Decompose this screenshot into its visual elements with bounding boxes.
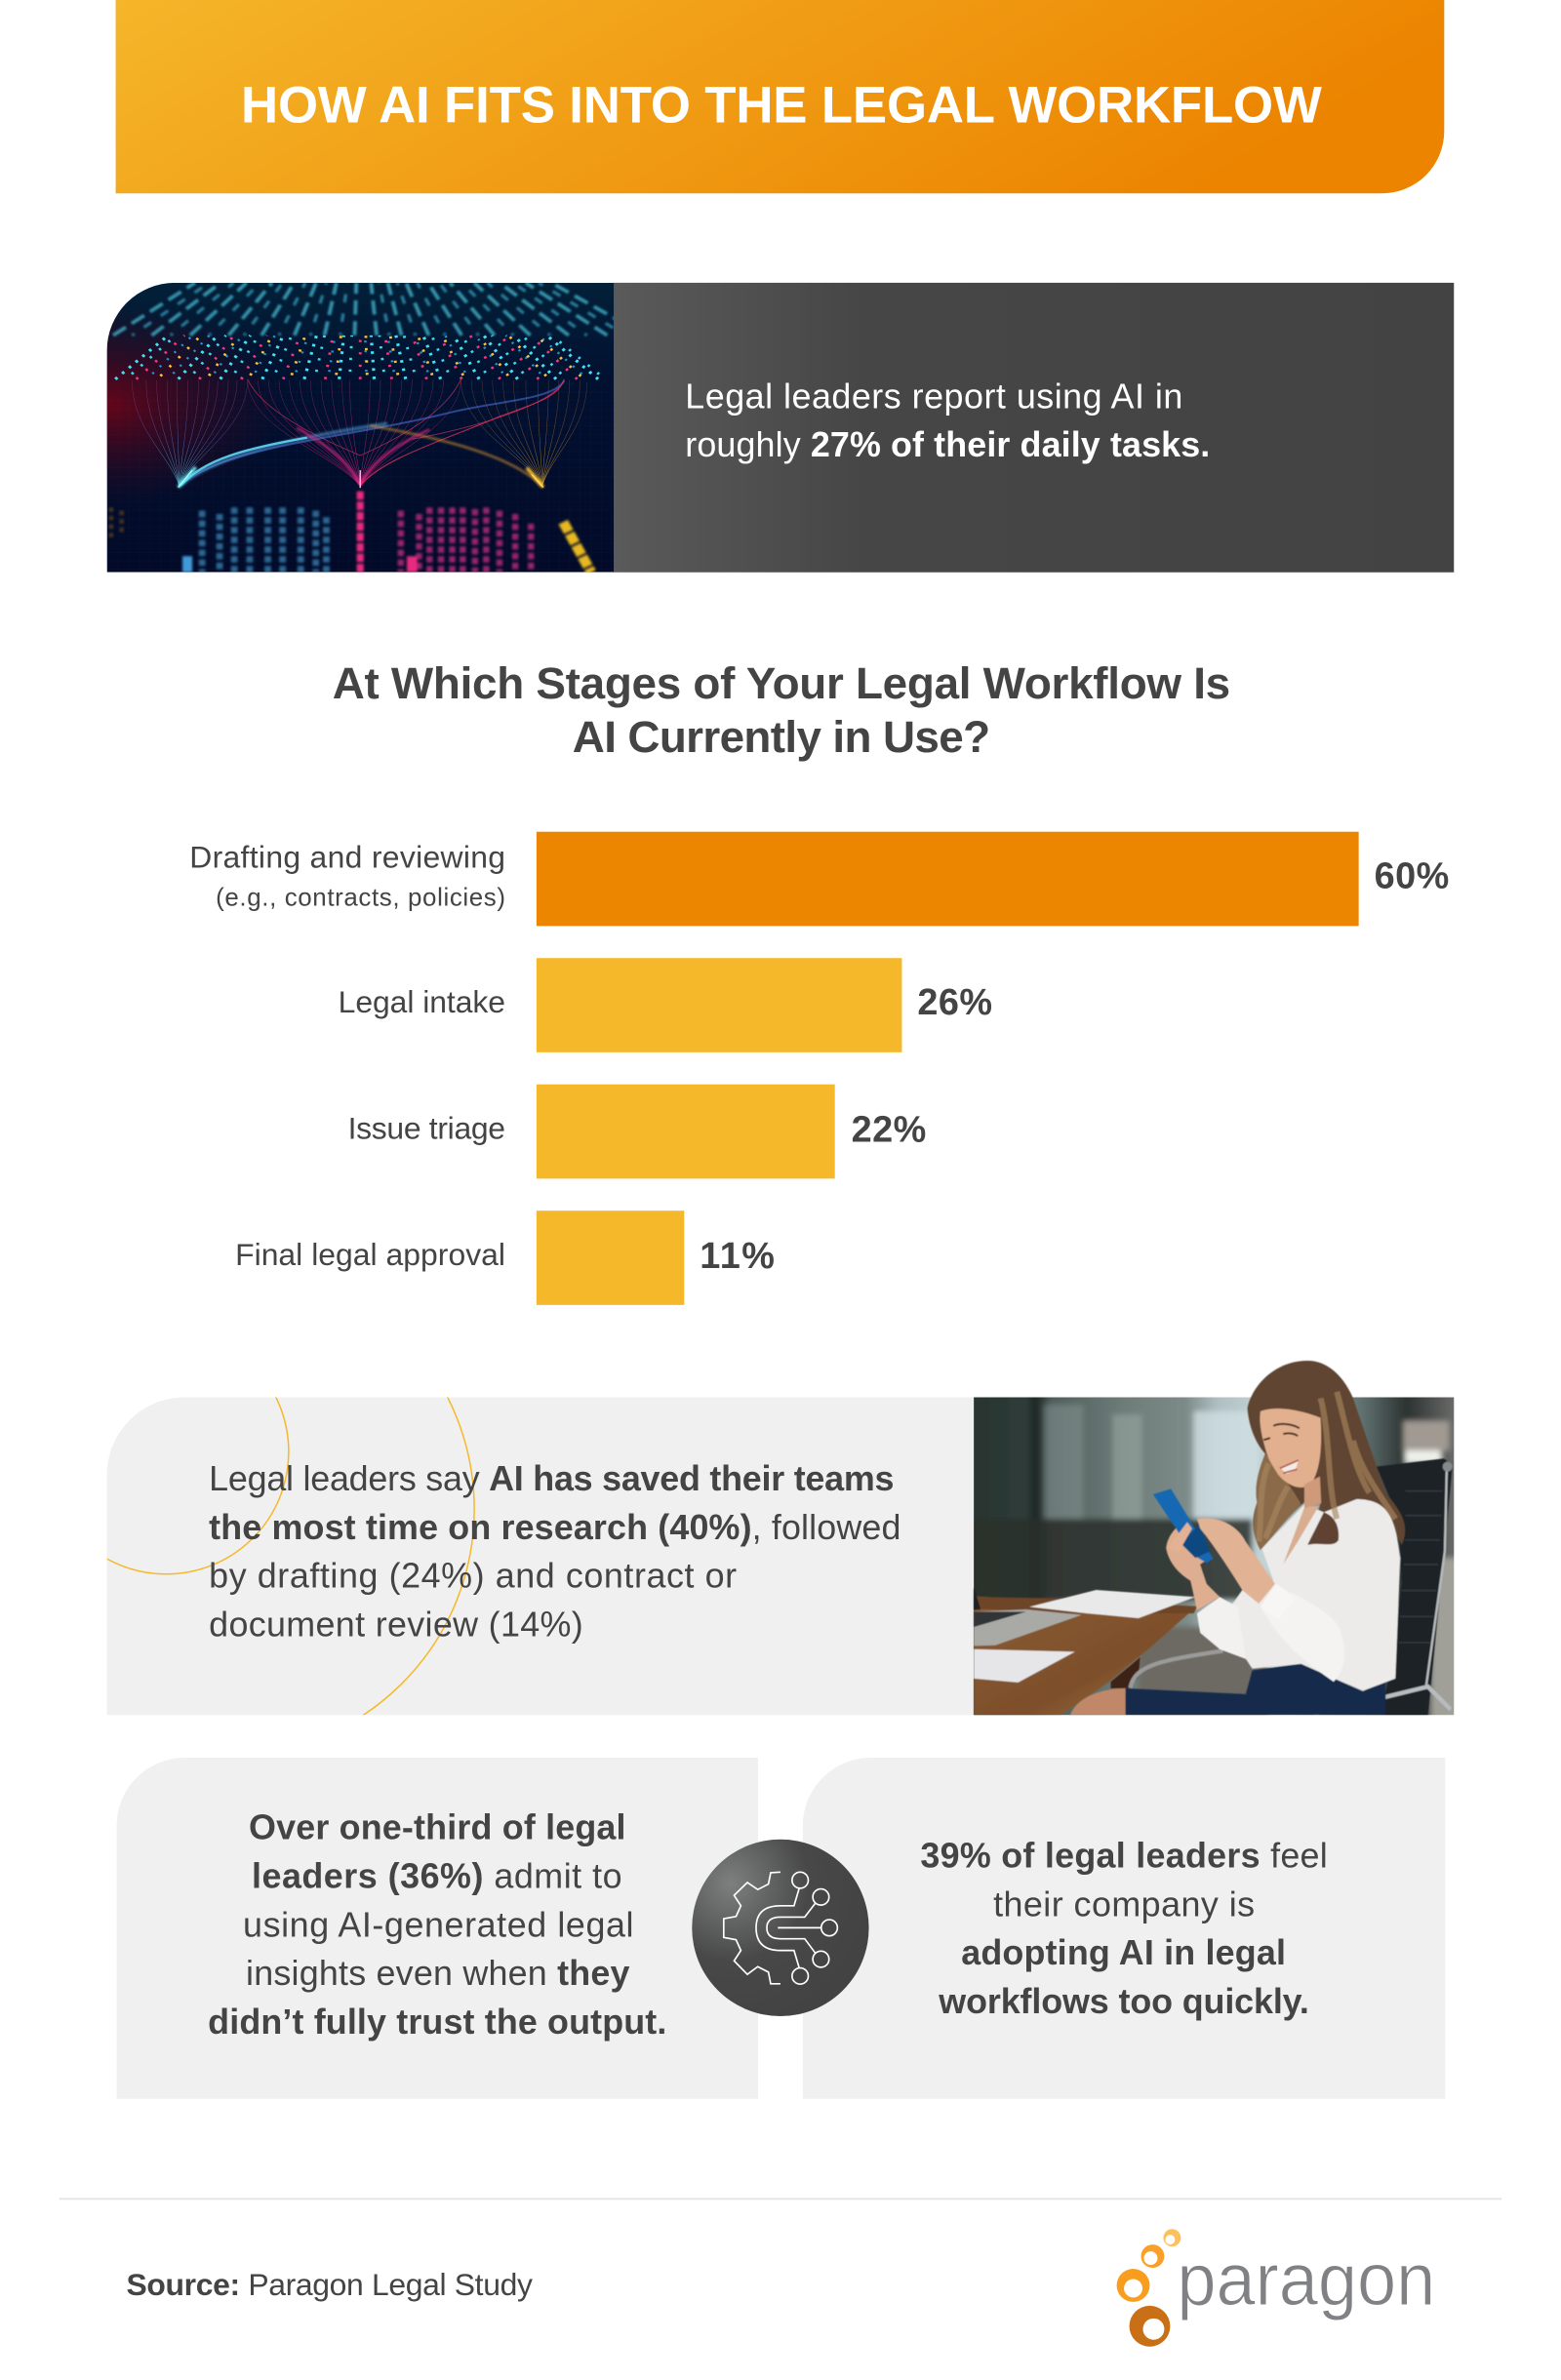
time saved text bbox=[209, 1459, 901, 1645]
face bbox=[1260, 1408, 1321, 1488]
hair back bbox=[1248, 1361, 1405, 1550]
adoption text: their company is bbox=[993, 1884, 1255, 1924]
source note: Source: Paragon Legal Study bbox=[127, 2267, 533, 2302]
logo: paragon bbox=[1117, 2229, 1435, 2347]
trust text: Over one-third of legal bbox=[249, 1808, 626, 1847]
trust text: leaders (36%) admit to bbox=[252, 1857, 622, 1896]
hair front bbox=[1307, 1512, 1339, 1545]
bar: drafting and reviewing: 60% bbox=[1375, 855, 1449, 896]
bar: drafting and reviewing: (e.g., contracts, policies) bbox=[216, 884, 505, 911]
panel: time saved bbox=[107, 1360, 1454, 1715]
blouse bbox=[1197, 1499, 1400, 1691]
desk bbox=[974, 1597, 1197, 1715]
adoption text bbox=[920, 1837, 1328, 2021]
time saved text: document review (14%) bbox=[209, 1606, 583, 1645]
bar: final legal approval: 11% bbox=[700, 1236, 775, 1277]
panel: daily AI use bbox=[107, 283, 1454, 573]
time saved text: by drafting (24%) and contract or bbox=[209, 1557, 737, 1596]
chart heading: AI Currently in Use? bbox=[573, 712, 990, 762]
chair bbox=[1377, 1458, 1453, 1715]
bar chart bbox=[189, 832, 1449, 1305]
logo wordmark: paragon bbox=[1177, 2239, 1435, 2321]
image: data network visual bbox=[107, 283, 645, 573]
long sweeps bbox=[180, 379, 564, 487]
adoption text: adopting AI in legal bbox=[961, 1933, 1286, 1972]
trust text bbox=[208, 1808, 666, 2042]
bar: issue triage: 22% bbox=[852, 1109, 926, 1150]
panel: trust in output bbox=[117, 1758, 758, 2099]
bar: final legal approval: Final legal approval bbox=[235, 1237, 505, 1272]
fans bbox=[132, 379, 587, 487]
bar: issue triage bbox=[348, 1085, 926, 1178]
bar: issue triage: Issue triage bbox=[348, 1111, 505, 1146]
bar: drafting and reviewing bbox=[189, 832, 1449, 926]
logo circles bbox=[1117, 2229, 1181, 2347]
bar: legal intake: 26% bbox=[917, 982, 992, 1023]
time saved text: the most time on research (40%), followed bbox=[209, 1508, 901, 1547]
icon: gear with circuit nodes bbox=[692, 1840, 869, 2016]
dark text panel bbox=[614, 283, 1454, 573]
title banner bbox=[116, 0, 1444, 193]
stat text bbox=[685, 377, 1210, 464]
bar: final legal approval bbox=[235, 1210, 775, 1305]
bar: drafting and reviewing: Drafting and reviewing bbox=[189, 840, 505, 875]
adoption text: 39% of legal leaders feel bbox=[920, 1837, 1328, 1876]
cuff bbox=[1197, 1597, 1246, 1659]
leg and skirt bbox=[1070, 1688, 1127, 1715]
bottom data columns bbox=[111, 492, 591, 573]
chart heading: At Which Stages of Your Legal Workflow Is bbox=[333, 658, 1230, 708]
hands and phone bbox=[1166, 1524, 1220, 1610]
trust text: using AI-generated legal bbox=[243, 1905, 633, 1944]
trust text: didn’t fully trust the output. bbox=[208, 2003, 666, 2042]
stat text: Legal leaders report using AI in bbox=[685, 377, 1182, 416]
adoption text: workflows too quickly. bbox=[938, 1982, 1309, 2021]
chart heading bbox=[333, 658, 1230, 762]
trust text: insights even when they bbox=[246, 1954, 630, 1993]
panel: adoption pace bbox=[803, 1758, 1445, 2099]
stat text: roughly 27% of their daily tasks. bbox=[685, 425, 1210, 464]
bar: legal intake bbox=[339, 958, 992, 1052]
title: HOW AI FITS INTO THE LEGAL WORKFLOW bbox=[241, 77, 1322, 135]
photo: woman using phone bbox=[966, 1361, 1467, 1721]
bar: legal intake: Legal intake bbox=[339, 984, 505, 1019]
time saved text: Legal leaders say AI has saved their teams bbox=[209, 1459, 894, 1498]
